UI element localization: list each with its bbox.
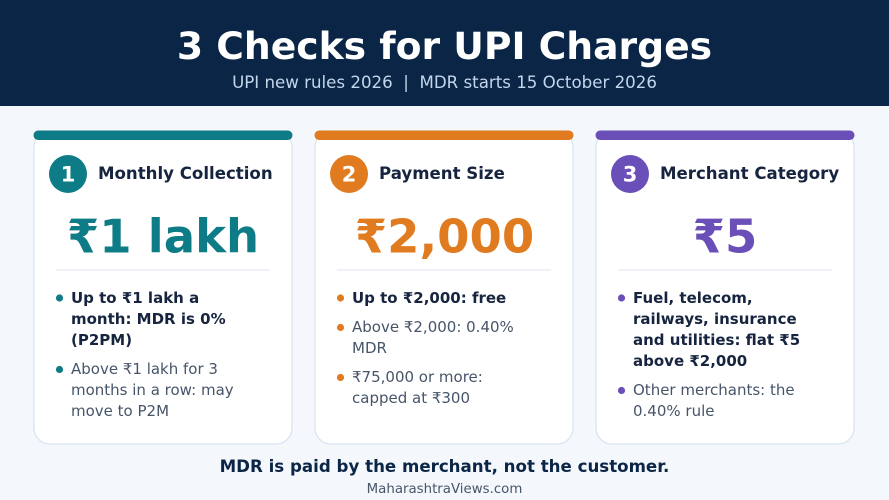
subtitle: UPI new rules 2026 | MDR starts 15 October 2026 <box>232 73 657 92</box>
bullet list: capped at ₹300 <box>352 389 470 407</box>
title: 3 Checks for UPI Charges <box>177 24 712 68</box>
bullet list <box>337 289 514 407</box>
bullet list: month: MDR is 0% <box>71 310 226 328</box>
heading: Monthly Collection <box>98 164 273 183</box>
icon: number 2 <box>330 155 368 193</box>
icon: number 3 <box>611 155 649 193</box>
bullet list: ₹75,000 or more: <box>352 368 483 386</box>
bullet list: (P2PM) <box>71 331 132 349</box>
heading: Merchant Category <box>660 164 839 183</box>
bullet list: months in a row: may <box>71 381 234 399</box>
icon: number 2: 2 <box>342 162 356 186</box>
bullet list: above ₹2,000 <box>633 352 747 370</box>
big value: ₹2,000 <box>355 210 534 264</box>
bullet list <box>618 289 800 420</box>
big value: ₹5 <box>693 210 757 264</box>
big value: ₹1 lakh <box>67 210 259 264</box>
bullet list: and utilities: flat ₹5 <box>633 331 800 349</box>
icon: number 1 <box>49 155 87 193</box>
bullet list: railways, insurance <box>633 310 797 328</box>
bullet list: 0.40% rule <box>633 402 714 420</box>
bullet list: MDR <box>352 339 387 357</box>
bullet list <box>56 289 234 420</box>
bullet list: Up to ₹2,000: free <box>352 289 506 307</box>
bullet list: Fuel, telecom, <box>633 289 753 307</box>
bullet list: Up to ₹1 lakh a <box>71 289 199 307</box>
bullet list: Other merchants: the <box>633 381 795 399</box>
bullet list: Above ₹2,000: 0.40% <box>352 318 514 336</box>
panel: payment size <box>314 130 574 444</box>
icon: number 3: 3 <box>623 162 637 186</box>
footer note: MDR is paid by the merchant, not the customer. <box>220 457 669 476</box>
icon: number 1: 1 <box>61 162 75 186</box>
panel: merchant category <box>596 130 854 444</box>
source credit: MaharashtraViews.com <box>367 482 522 497</box>
heading: Payment Size <box>379 164 505 183</box>
header banner <box>0 0 889 106</box>
panel: monthly collection <box>34 130 292 444</box>
bullet list: Above ₹1 lakh for 3 <box>71 360 218 378</box>
bullet list: move to P2M <box>71 402 169 420</box>
